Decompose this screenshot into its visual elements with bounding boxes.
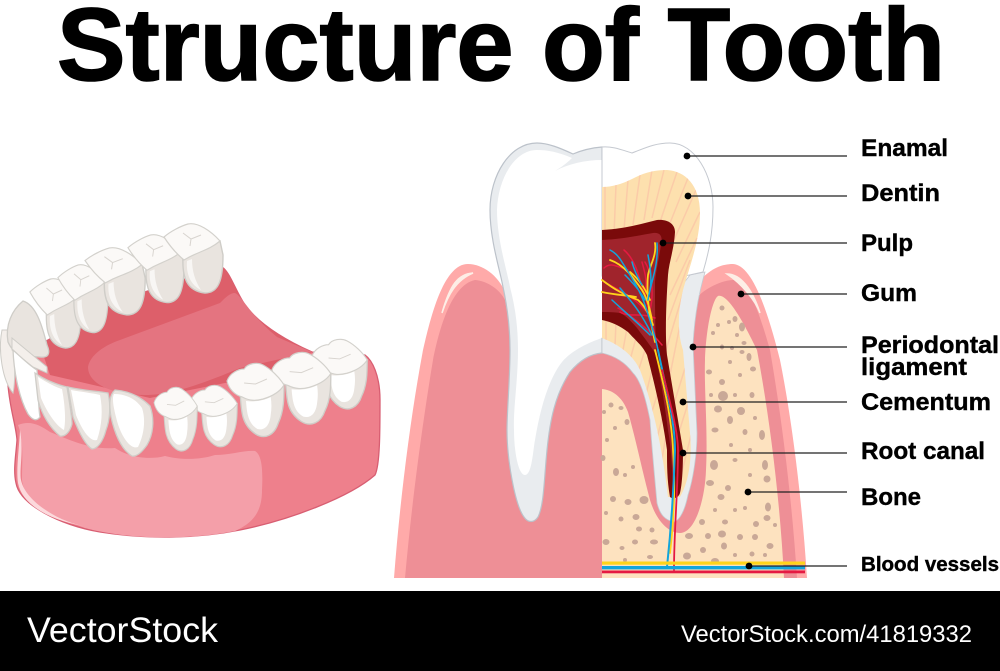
labels: Pulp xyxy=(861,230,913,257)
yellow nerves xyxy=(602,243,655,342)
nerves and blood vessels in pulp xyxy=(602,243,678,570)
mouth floor xyxy=(40,267,312,398)
enamel xyxy=(602,143,713,276)
bone pores xyxy=(600,306,777,564)
left gum inner xyxy=(405,280,602,578)
jaw bone xyxy=(602,296,784,578)
back row teeth xyxy=(0,224,223,393)
footer image id: VectorStock.com/41819332 xyxy=(681,621,972,648)
red vessels xyxy=(604,250,662,370)
labels xyxy=(861,135,999,576)
dentin xyxy=(602,170,700,497)
gum shine left xyxy=(442,273,473,313)
labels: Enamal xyxy=(861,135,948,162)
pulp chamber light xyxy=(602,233,675,490)
illustration: lower jaw with teeth xyxy=(0,224,380,537)
dentin tubules xyxy=(605,170,700,480)
tooth left half interior xyxy=(497,150,602,475)
labels: Periodontal xyxy=(861,332,999,359)
vessels along jaw xyxy=(602,562,805,573)
labels: Cementum xyxy=(861,389,991,416)
labels: ligament xyxy=(861,354,967,381)
gum shine right xyxy=(727,274,760,313)
pulp chamber dark xyxy=(602,220,683,498)
right gum outer xyxy=(700,264,807,578)
tooth left half exterior xyxy=(490,143,602,522)
front gum highlight xyxy=(18,423,262,537)
illustration: tooth cross-section xyxy=(394,143,807,578)
tongue area highlight xyxy=(88,293,312,395)
labels: Gum xyxy=(861,280,917,307)
periodontal ligament xyxy=(602,272,705,522)
leader lines and dots xyxy=(660,153,847,569)
right gum inner xyxy=(602,280,797,578)
footer bar xyxy=(0,591,1000,671)
labels: Root canal xyxy=(861,438,985,465)
labels: Dentin xyxy=(861,180,940,207)
front row teeth xyxy=(13,339,367,456)
labels: Bone xyxy=(861,484,921,511)
left gum outer xyxy=(394,264,560,578)
blue vessels xyxy=(610,243,658,350)
labels: Blood vessels xyxy=(861,554,999,576)
gum shine xyxy=(17,430,83,526)
jaw gum xyxy=(8,267,380,537)
root canal vessels xyxy=(655,350,674,553)
footer logo: VectorStock xyxy=(27,611,219,650)
